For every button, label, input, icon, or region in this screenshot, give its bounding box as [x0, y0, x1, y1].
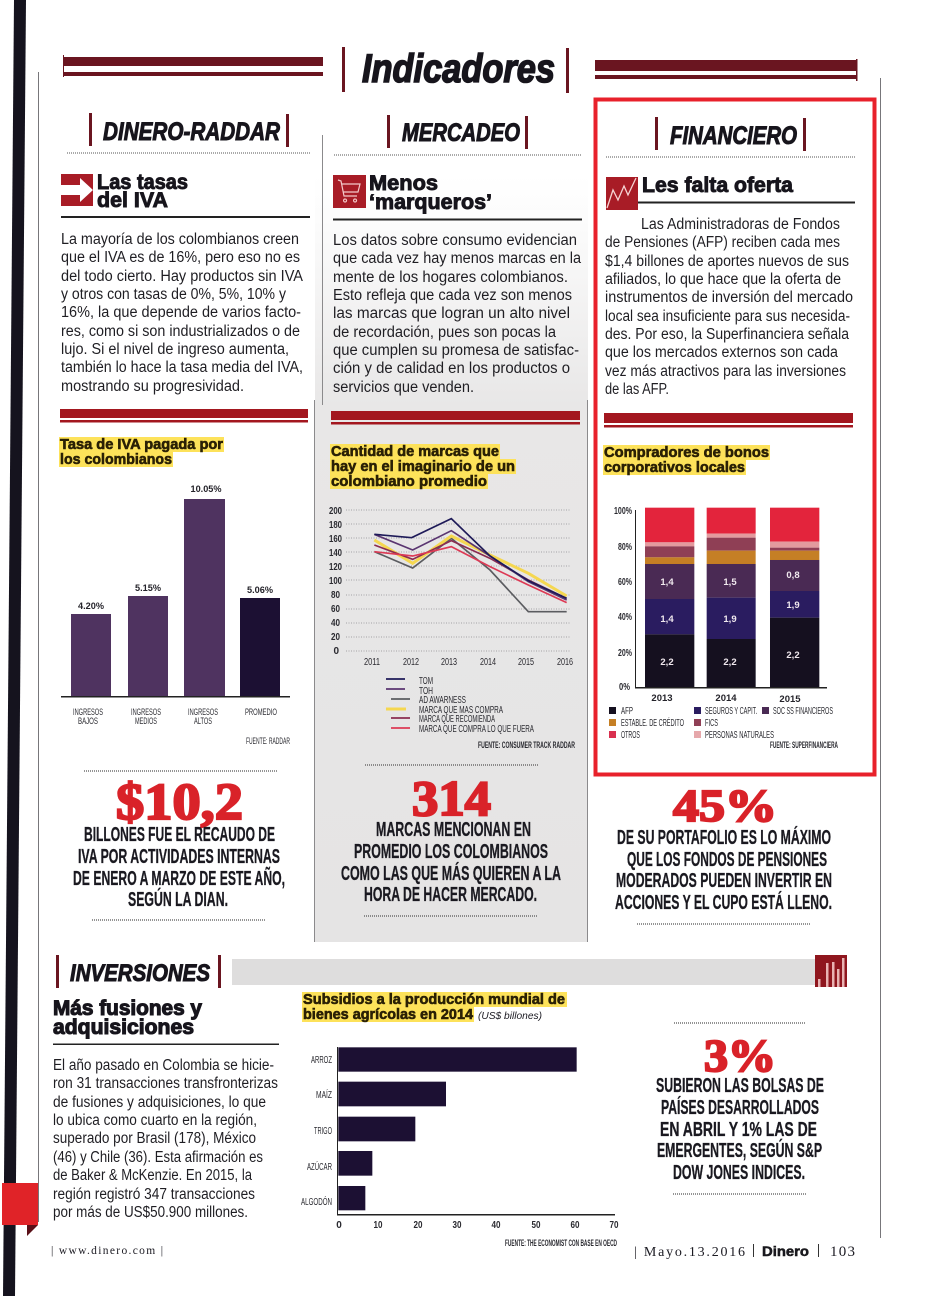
- section heading: Dinero-Raddar: DINERO-RADDAR: [103, 118, 280, 146]
- y axis labels: 160: [329, 534, 342, 545]
- text block: marcas: mente de los hogares colombianos.: [333, 269, 568, 286]
- category labels: MAÍZ: [316, 1088, 332, 1101]
- text block: fusiones: de fusiones y adquisiciones, lo que: [53, 1094, 266, 1111]
- y axis labels: [614, 506, 632, 693]
- value labels: 10.05%: [190, 484, 222, 495]
- y axis labels: 200: [329, 506, 342, 517]
- axis labels: ALTOS: [194, 716, 212, 726]
- heading: Las tasas del IVA: del IVA: [97, 189, 168, 212]
- text block: AFP: instrumentos de inversión del mercado: [605, 289, 853, 306]
- y axis labels: 140: [329, 548, 342, 559]
- y axis labels: 180: [329, 520, 342, 531]
- grid: [346, 510, 570, 651]
- column borders: [314, 135, 588, 942]
- icon: falling chart: [606, 177, 638, 210]
- x axis labels: 2015: [518, 657, 534, 668]
- chart: Tasa de IVA: [59, 437, 290, 746]
- segment values: [660, 570, 800, 668]
- segment values: 1,9: [786, 600, 800, 611]
- chart title: hay en el imaginario de un: [331, 459, 515, 475]
- page spine bar: [3, 0, 26, 1296]
- text block: fusiones: región registró 347 transacciones: [53, 1186, 255, 1203]
- value axis: 70: [610, 1220, 619, 1231]
- segment values: 2,2: [723, 657, 737, 668]
- axis labels: INGRESOS: [188, 707, 218, 717]
- stat: 314: HORA DE HACER MERCADO.: [364, 884, 537, 906]
- legend: SOC SS FINANCIEROS: [773, 706, 833, 717]
- y axis labels: 80%: [618, 542, 632, 553]
- heading: Más fusiones y adquisiciones: Más fusiones y: [53, 997, 202, 1020]
- category labels: AZÚCAR: [307, 1160, 332, 1173]
- section heading: Mercadeo: [387, 115, 528, 149]
- icon: shopping cart: [333, 175, 366, 208]
- panel: financiero column: [603, 117, 856, 924]
- heading: Más fusiones y adquisiciones: adquisiciones: [53, 1016, 194, 1039]
- text block: marcas: Esto refleja que cada vez son menos: [333, 287, 572, 304]
- text block: marcas: Los datos sobre consumo evidencian: [333, 232, 577, 249]
- chart title: [302, 992, 567, 1023]
- value axis: 40: [492, 1220, 501, 1231]
- footer right: 103: [830, 1244, 855, 1260]
- text block: AFP: local sea insuficiente para sus necesida-: [605, 308, 850, 325]
- chart: Cantidad de marcas: [329, 444, 575, 750]
- text block: marcas: de recordación, pues son pocas la: [333, 324, 556, 341]
- text block: IVA: del todo cierto. Hay productos sin IVA: [61, 268, 304, 285]
- text block: fusiones: [53, 1057, 278, 1221]
- value axis: 20: [414, 1220, 423, 1231]
- y axis labels: 40: [331, 618, 340, 629]
- legend: FICS: [705, 718, 718, 729]
- text block: marcas: servicios que venden.: [333, 379, 474, 396]
- text block: marcas: que cumplen su promesa de satisfac-: [333, 342, 579, 359]
- x axis labels: [364, 657, 573, 668]
- legend: [609, 706, 833, 741]
- text block: AFP: que los mercados externos son cada: [605, 344, 838, 361]
- stat: 3%: 3%: [704, 1030, 776, 1081]
- icon: bar chart: [815, 955, 847, 987]
- value axis: 0: [336, 1220, 342, 1231]
- text block: AFP: des. Por eso, la Superfinanciera señala: [605, 326, 849, 343]
- stat: 314: 314: [412, 770, 491, 826]
- panel: dinero-raddar column: [59, 113, 310, 920]
- stacked bars: [645, 508, 819, 687]
- stat: 3%: SUBIERON LAS BOLSAS DE: [656, 1075, 824, 1097]
- source: FUENTE: CONSUMER TRACK RADDAR: [478, 740, 575, 750]
- stat: 3%: EN ABRIL Y 1% LAS DE: [660, 1119, 817, 1141]
- legend: OTROS: [621, 730, 640, 741]
- chart: Compradores de bonos: [603, 445, 838, 750]
- y axis labels: 40%: [618, 612, 632, 623]
- heading: Menos marqueros: ‘marqueros’: [369, 191, 492, 214]
- text block: IVA: La mayoría de los colombianos creen: [61, 231, 299, 248]
- legend: TOM: [419, 676, 433, 687]
- footer right: [634, 1244, 855, 1260]
- text block: fusiones: lo ubica como cuarto en la región,: [53, 1112, 257, 1129]
- text block: AFP: [605, 216, 853, 398]
- segment values: 2,2: [786, 650, 800, 661]
- y axis labels: 100: [329, 576, 342, 587]
- text block: IVA: mostrando su progresividad.: [61, 378, 244, 395]
- axis labels: [73, 707, 277, 726]
- legend: MARCA QUE COMPRA LO QUE FUERA: [419, 724, 534, 735]
- x axis labels: 2014: [480, 657, 496, 668]
- legend: ESTABLE. DE CRÉDITO: [621, 716, 684, 729]
- y axis labels: 120: [329, 562, 342, 573]
- segment values: 1,4: [660, 577, 674, 588]
- value axis: [336, 1220, 619, 1231]
- bars: [71, 499, 280, 696]
- stat: 314: [341, 770, 561, 906]
- section heading: Mercadeo: MERCADEO: [402, 119, 520, 147]
- panel: financiero highlight box: [596, 100, 874, 774]
- legend: PERSONAS NATURALES: [705, 730, 774, 741]
- legend: MARCA QUE MAS COMPRA: [419, 705, 503, 716]
- panel: inversiones: [53, 955, 847, 1248]
- category labels: ALGODÓN: [301, 1195, 332, 1208]
- y axis labels: 0: [333, 646, 339, 657]
- category labels: TRIGO: [314, 1126, 332, 1137]
- right header rule: [595, 59, 858, 81]
- axis labels: INGRESOS: [131, 707, 161, 717]
- value labels: 4.20%: [78, 601, 105, 612]
- value axis: 10: [374, 1220, 383, 1231]
- legend: TOH: [419, 686, 433, 697]
- footer right: Dinero: [762, 1244, 809, 1259]
- text block: marcas: [333, 232, 581, 396]
- chart title: los colombianos: [60, 452, 172, 468]
- text block: fusiones: superado por Brasil (178), México: [53, 1130, 256, 1147]
- y axis labels: 20%: [618, 648, 632, 659]
- legend: MARCA QUE RECOMIENDA: [419, 714, 495, 725]
- x axis labels: [651, 693, 801, 705]
- chart title: colombiano promedio: [331, 474, 487, 490]
- x axis labels: 2013: [441, 657, 457, 668]
- legend: SEGUROS Y CAPIT.: [705, 706, 757, 717]
- legend: [386, 676, 534, 735]
- text block: IVA: res, como si son industrializados o de: [61, 323, 300, 340]
- y axis labels: 80: [331, 590, 340, 601]
- y axis labels: 0%: [619, 682, 630, 693]
- x axis labels: 2012: [403, 657, 419, 668]
- section heading: Financiero: [655, 117, 806, 151]
- text block: fusiones: por más de US$50.900 millones.: [53, 1204, 248, 1221]
- text block: IVA: lujo. Si el nivel de ingreso aumenta,: [61, 341, 289, 358]
- text block: AFP: afiliados, lo que hace que la oferta de: [605, 271, 841, 288]
- chart title: Cantidad de marcas que: [331, 444, 499, 460]
- icon: red arrow: [61, 174, 93, 206]
- source: FUENTE: SUPERFINANCIERA: [770, 740, 838, 750]
- legend: AD AWARNESS: [419, 695, 466, 706]
- y axis labels: 20: [331, 632, 340, 643]
- x axis labels: 2015: [779, 694, 801, 705]
- panel: mercadeo column: [329, 115, 582, 916]
- title: Indicadores: [362, 47, 555, 91]
- lines: [374, 519, 567, 612]
- heading: Las tasas del IVA: Las tasas: [97, 171, 188, 194]
- heading: Menos marqueros: [369, 172, 492, 214]
- chart title: (US$ billones): [478, 1010, 542, 1022]
- segment values: 0,8: [786, 570, 800, 581]
- text block: IVA: 16%, la que depende de varios facto-: [61, 304, 301, 321]
- value labels: [78, 484, 274, 612]
- axis labels: BAJOS: [78, 716, 98, 726]
- axis labels: MEDIOS: [135, 716, 157, 726]
- chart: Subsidios: [301, 992, 619, 1248]
- text block: IVA: y otros con tasas de 0%, 5%, 10% y: [61, 286, 286, 303]
- x axis labels: 2013: [651, 693, 673, 704]
- segment values: 1,9: [723, 614, 737, 625]
- stat: $10,2: DE ENERO A MARZO DE ESTE AÑO,: [73, 867, 285, 890]
- x axis labels: 2014: [715, 693, 737, 704]
- chart title: Tasa de IVA pagada por: [60, 437, 223, 453]
- text block: AFP: $1,4 billones de aportes nuevos de sus: [605, 253, 849, 270]
- chart title: corporativos locales: [604, 460, 745, 476]
- text block: fusiones: El año pasado en Colombia se hicie-: [53, 1057, 274, 1074]
- text block: marcas: que cada vez hay menos marcas en la: [333, 250, 581, 267]
- footer left: | www.dinero.com |: [51, 1245, 163, 1257]
- text block: fusiones: de Baker & McKenzie. En 2015, la: [53, 1167, 252, 1184]
- value labels: 5.15%: [135, 583, 162, 594]
- panel: grey centre column: [315, 175, 588, 942]
- footer right: | Mayo.13.2016: [634, 1245, 745, 1260]
- stat: 3%: EMERGENTES, SEGÚN S&P: [657, 1138, 822, 1162]
- category labels: [301, 1055, 332, 1208]
- text block: marcas: las marcas que logran un alto nivel: [333, 305, 570, 322]
- heading: Les falta oferta: Les falta oferta: [642, 174, 793, 197]
- stat: 45%: [615, 780, 832, 914]
- stat: 45%: 45%: [673, 780, 777, 831]
- y axis labels: 100%: [614, 506, 632, 517]
- stat: 3%: PAÍSES DESARROLLADOS: [661, 1096, 819, 1119]
- stat: $10,2: SEGÚN LA DIAN.: [128, 887, 228, 911]
- text block: fusiones: (46) y Chile (36). Esta afirmación es: [53, 1149, 263, 1166]
- bars: [338, 1047, 577, 1210]
- y axis labels: 60: [331, 604, 340, 615]
- y axis labels: 60%: [618, 577, 632, 588]
- stat: 3%: [656, 1030, 824, 1184]
- heading: Más fusiones y adquisiciones: [53, 997, 202, 1039]
- section heading: Dinero-Raddar: [89, 113, 289, 147]
- chart title: Subsidios a la producción mundial de: [303, 992, 565, 1008]
- value labels: 5.06%: [247, 585, 274, 596]
- text block: IVA: también lo hace la tasa media del IVA,: [61, 359, 303, 376]
- x axis labels: 2011: [364, 657, 380, 668]
- stat: $10,2: $10,2: [116, 774, 243, 831]
- axis labels: INGRESOS: [73, 707, 103, 717]
- y axis labels: [329, 506, 342, 657]
- axis labels: PROMEDIO: [245, 707, 277, 717]
- stat: 314: COMO LAS QUE MÁS QUIEREN A LA: [341, 862, 561, 885]
- stat: 314: PROMEDIO LOS COLOMBIANOS: [354, 841, 548, 863]
- text block: IVA: [61, 231, 304, 395]
- chart title: bienes agrícolas en 2014: [303, 1007, 473, 1023]
- value axis: 30: [452, 1220, 462, 1231]
- value axis: 60: [570, 1220, 580, 1231]
- section heading: Financiero: FINANCIERO: [670, 122, 797, 150]
- source: FUENTE: THE ECONOMIST CON BASE EN OECD: [505, 1238, 617, 1248]
- text block: marcas: ción y de calidad en los productos o: [333, 360, 570, 377]
- text block: IVA: que el IVA es de 16%, pero eso no es: [61, 249, 300, 266]
- x axis labels: 2016: [557, 657, 573, 668]
- stat: $10,2: BILLONES FUE EL RECAUDO DE: [84, 824, 275, 846]
- chart title: Compradores de bonos: [604, 445, 769, 461]
- stat: 314: MARCAS MENCIONAN EN: [376, 819, 531, 841]
- stat: 3%: DOW JONES INDICES.: [673, 1162, 805, 1184]
- legend: AFP: [621, 706, 633, 717]
- chart title: [603, 445, 770, 476]
- section heading: Inversiones: INVERSIONES: [70, 960, 210, 987]
- text block: AFP: vez más atractivos para las inversiones: [605, 363, 846, 380]
- heading: Las tasas del IVA: [97, 171, 188, 212]
- segment values: 1,5: [723, 577, 737, 588]
- value axis: 50: [532, 1220, 541, 1231]
- text block: fusiones: ron 31 transacciones transfronterizas: [53, 1075, 278, 1092]
- category labels: ARROZ: [311, 1055, 332, 1066]
- left header rule: [63, 55, 323, 77]
- source: FUENTE: RADDAR: [246, 736, 290, 746]
- chart title: [330, 444, 516, 490]
- text block: AFP: de Pensiones (AFP) reciben cada mes: [605, 234, 840, 251]
- segment values: 2,2: [660, 657, 674, 668]
- stat: $10,2: [73, 774, 285, 911]
- text block: AFP: de las AFP.: [605, 381, 669, 398]
- heading: Menos marqueros: Menos: [369, 172, 438, 195]
- segment values: 1,4: [660, 614, 674, 625]
- text block: AFP: Las Administradoras de Fondos: [641, 216, 840, 233]
- stat: $10,2: IVA POR ACTIVIDADES INTERNAS: [78, 846, 280, 868]
- chart title: [59, 437, 224, 468]
- red page tab: [2, 1183, 38, 1236]
